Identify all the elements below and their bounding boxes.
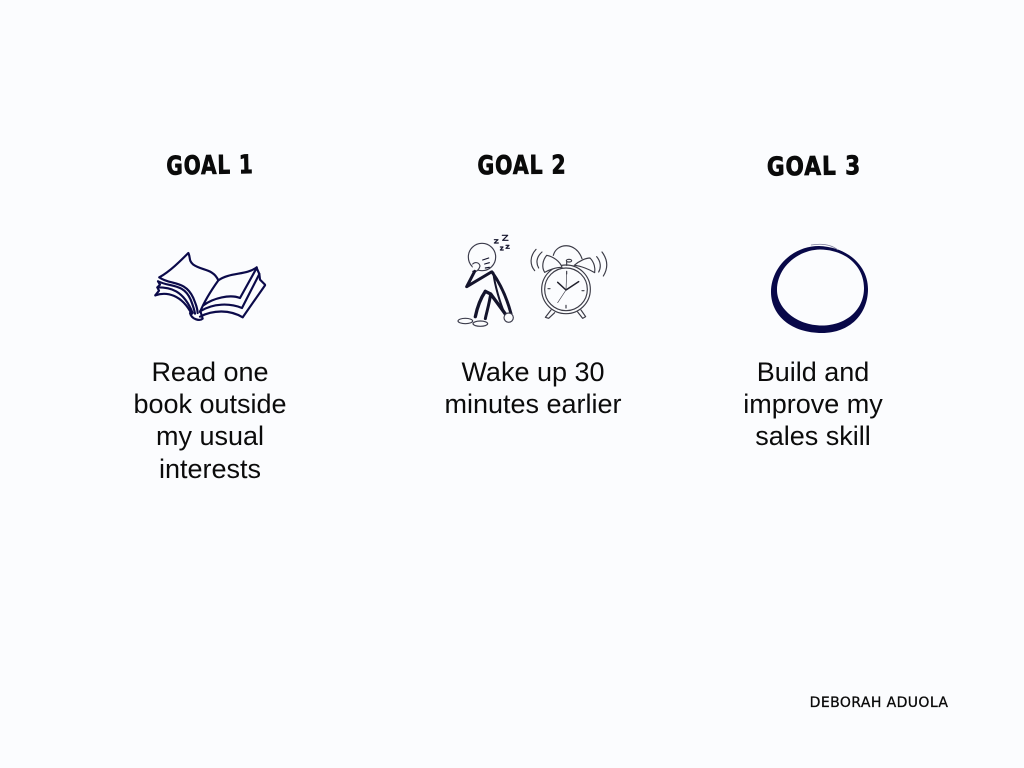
- icon: ringing alarm clock: [530, 245, 608, 319]
- text: goal 1 description: interests: [159, 454, 261, 484]
- text: goal 3 description: [743, 357, 883, 451]
- text: goal 2 description: minutes earlier: [444, 389, 622, 419]
- text: goal 1 description: Read one: [151, 357, 269, 387]
- text: goal 3 description: Build and: [757, 357, 869, 387]
- text: goal 3 description: improve my: [743, 389, 883, 419]
- text: goal 1 description: book outside: [133, 389, 287, 419]
- icon: sleepy person: [457, 234, 514, 327]
- signature: author name: DEBORAH ADUOLA: [810, 695, 948, 711]
- icon: hand-drawn circle: [771, 244, 868, 333]
- text: goal 1 description: my usual: [156, 421, 264, 451]
- heading: goal 2: GOAL 2: [477, 151, 567, 181]
- text: goal 1 description: [133, 357, 287, 484]
- text: goal 3 description: sales skill: [755, 421, 871, 451]
- text: goal 2 description: Wake up 30: [461, 357, 605, 387]
- heading: goal 1: GOAL 1: [166, 151, 254, 181]
- text: goal 2 description: [444, 357, 622, 419]
- icon: open book: [154, 252, 266, 321]
- heading: goal 3: GOAL 3: [767, 152, 861, 182]
